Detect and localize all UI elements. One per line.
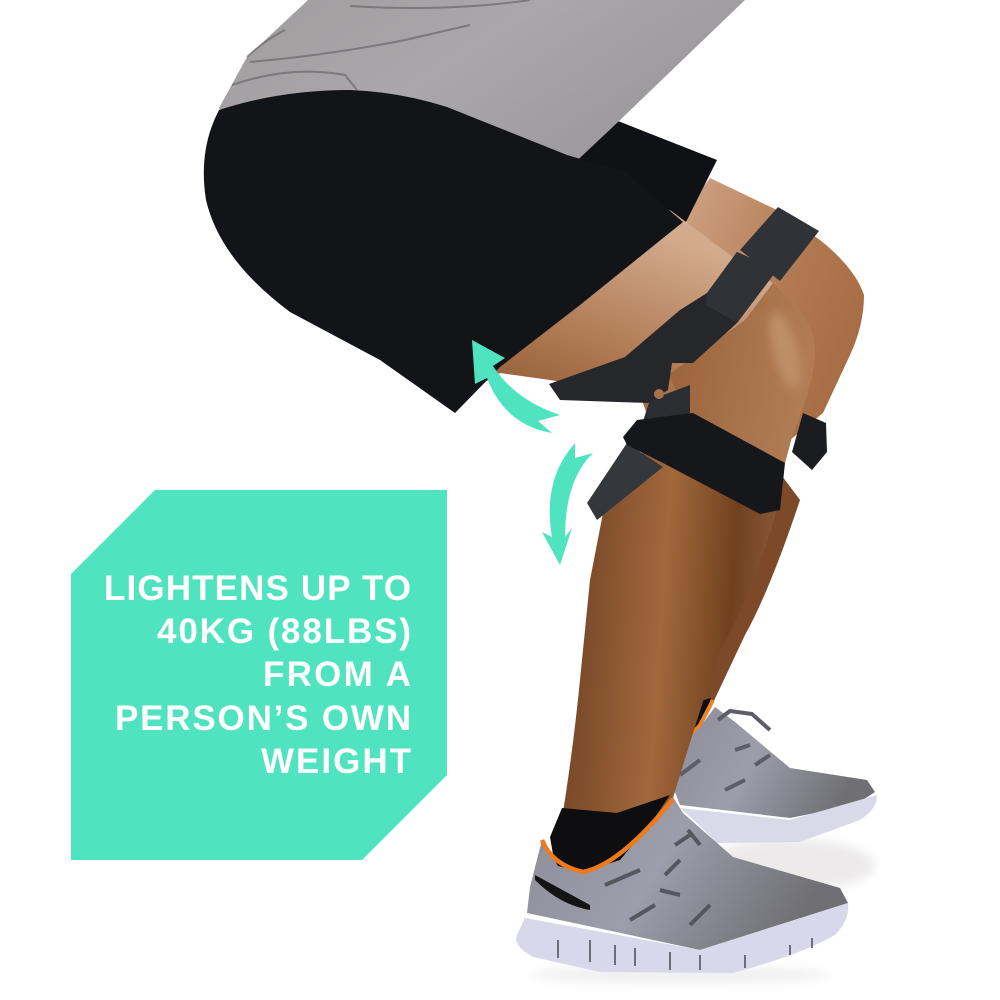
shirt <box>219 0 745 170</box>
strap pad <box>706 252 777 323</box>
back shoe sole <box>680 795 877 843</box>
floor shadow <box>530 839 875 984</box>
back shoe <box>671 698 877 843</box>
back shoe orange collar <box>675 700 713 752</box>
knee highlight <box>763 308 807 392</box>
back calf <box>660 460 800 745</box>
callout text: FROM A <box>263 655 411 694</box>
callout text: PERSON’S OWN <box>115 699 411 738</box>
callout text: 40KG (88LBS) <box>157 612 411 651</box>
callout text <box>104 569 411 781</box>
front thigh and knee <box>480 210 814 463</box>
icon: arrow up-left toward thigh <box>472 340 560 433</box>
sole tread <box>558 938 812 970</box>
callout background <box>71 490 447 860</box>
front shoe <box>516 795 848 973</box>
back knee upper strap <box>740 207 819 281</box>
lower strap <box>623 413 785 514</box>
front calf <box>560 440 785 830</box>
back sock <box>672 698 711 750</box>
back knee lower strap <box>792 413 827 470</box>
callout text: WEIGHT <box>261 742 411 781</box>
shoe details <box>605 830 710 925</box>
knee brace <box>549 252 785 520</box>
back shorts leg <box>560 121 717 222</box>
hinge screw <box>654 389 664 399</box>
shirt folds <box>232 0 530 90</box>
back thigh <box>683 178 864 440</box>
orange collar <box>542 799 673 872</box>
hinge connector <box>640 385 690 430</box>
upper strap and hinge arm <box>549 252 777 403</box>
front leg <box>480 210 814 830</box>
callout text: LIGHTENS UP TO <box>104 569 411 608</box>
back leg <box>560 121 864 745</box>
callout panel <box>71 490 447 860</box>
icon: arrow down along calf <box>542 443 593 565</box>
shorts <box>204 90 683 413</box>
knee shading <box>668 283 814 463</box>
front sock <box>550 795 670 872</box>
shoe logo <box>535 875 590 910</box>
shoe upper <box>527 797 848 950</box>
back shoe laces <box>680 711 770 790</box>
shoe sole <box>516 903 848 973</box>
lower plate <box>587 443 663 520</box>
back shoe upper <box>671 707 875 818</box>
